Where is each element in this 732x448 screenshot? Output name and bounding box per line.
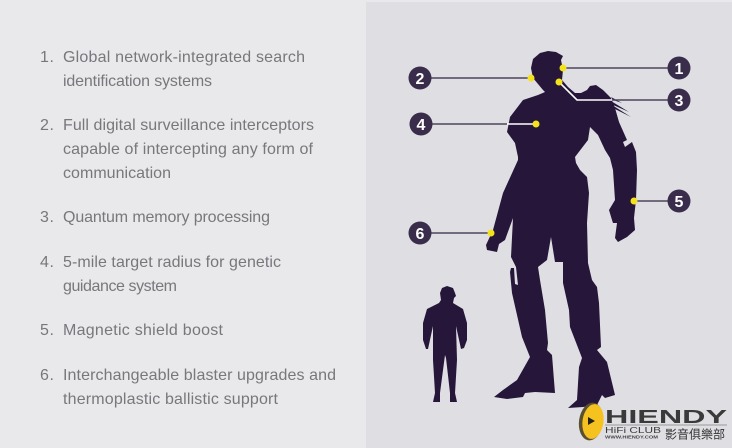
item 1: Global network-integrated search [63,49,305,66]
callout lines [420,68,668,233]
item 4: 5-mile target radius for genetic [63,254,281,271]
callout badge 5 [668,190,690,212]
logo: Hiendy HiFi Club [576,401,728,442]
callout badge 5: 5 [675,194,684,211]
callout badge 3: 3 [675,93,684,110]
item 2: communication [63,165,171,182]
item 4: 4. [40,254,54,271]
item 2: 2. [40,117,54,134]
callout badge 6: 6 [416,226,425,243]
item 3: 3. [40,209,54,226]
item 6 [40,367,336,408]
item 6: thermoplastic ballistic support [63,391,279,408]
item 6: 6. [40,367,54,384]
item 2 [40,117,314,182]
item 6: Interchangeable blaster upgrades and [63,367,336,384]
logo: Hiendy HiFi Club: HiFi CLUB [605,426,661,435]
item 5: 5. [40,322,54,339]
item 1 [40,49,305,90]
item 2: capable of intercepting any form of [63,141,314,158]
item 1: identification systems [63,73,212,90]
callout badge 2 [408,66,432,90]
logo: Hiendy HiFi Club: 影音俱樂部 [665,426,725,442]
callout badge 6 [408,222,432,244]
callout badge 1: 1 [675,61,684,78]
text list of features [40,49,336,408]
panel: figure background [366,2,732,448]
human silhouette [423,286,467,402]
callout dots [488,64,638,236]
logo: Hiendy HiFi Club: HIENDY [605,406,728,427]
item 5: Magnetic shield boost [63,322,224,339]
callout badge 2: 2 [416,71,425,88]
item 4: guidance system [63,278,177,295]
callout badge 4: 4 [417,117,426,134]
callout badge 1 [668,56,690,80]
callout badge 3 [668,88,690,112]
robot silhouette [486,51,637,408]
callout badge 4 [410,112,432,136]
item 3: Quantum memory processing [63,209,270,226]
item 2: Full digital surveillance interceptors [63,117,314,134]
item 1: 1. [40,49,54,66]
item 4 [40,254,281,295]
logo: Hiendy HiFi Club: WWW.HIENDY.COM [605,434,658,440]
